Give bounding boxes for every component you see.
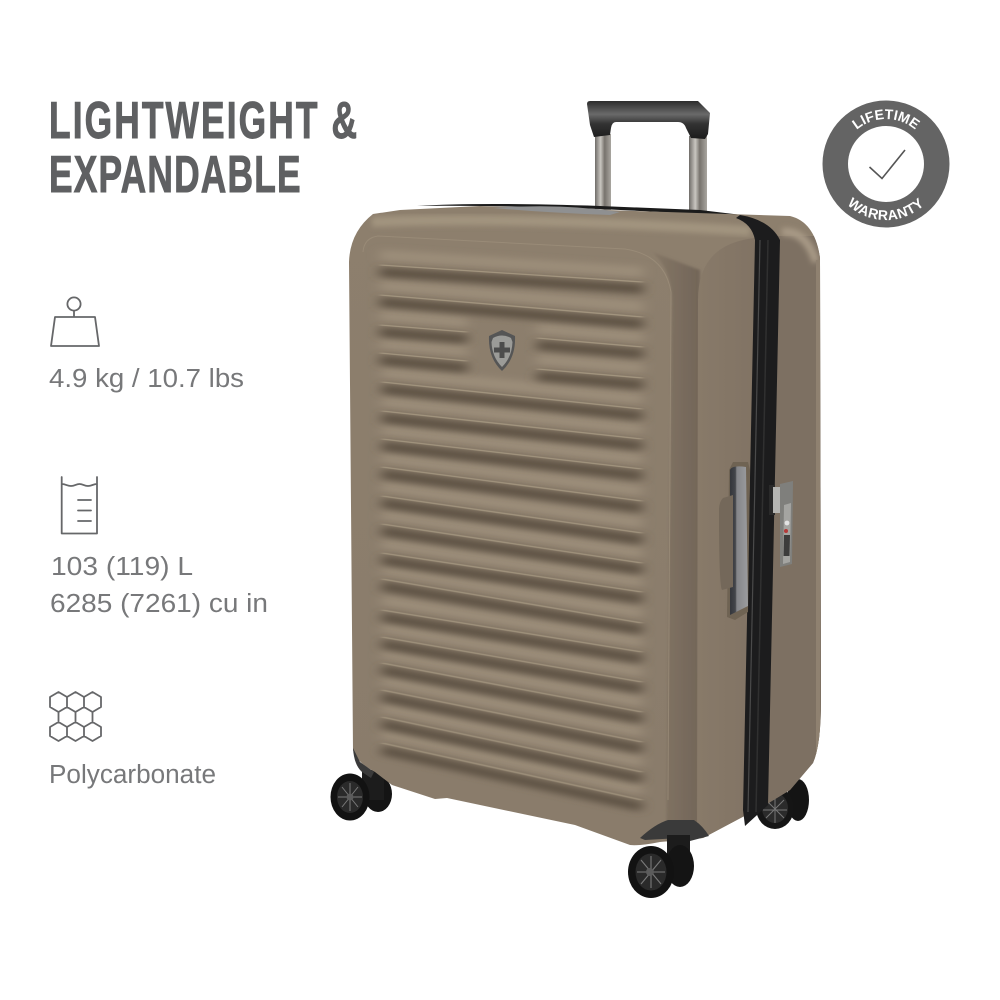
- side corner strip: [658, 256, 700, 842]
- right highlight: [782, 232, 816, 262]
- icon: check mark: [870, 150, 905, 178]
- spec: weight: [49, 297, 244, 393]
- rear wheels: [362, 770, 809, 829]
- spec: volume: [50, 477, 268, 618]
- combination lock: [769, 481, 793, 567]
- title: LIGHTWEIGHT &: [49, 92, 357, 150]
- icon: weight: [51, 297, 99, 346]
- right edge band: [816, 260, 820, 760]
- title: [49, 92, 357, 204]
- side panel right of zipper: [768, 236, 821, 804]
- volume text: [50, 553, 268, 618]
- volume text: 103 (119) L: [51, 553, 193, 581]
- badge text: lifetime: LIFETIME: [852, 109, 920, 130]
- front wheel: [628, 835, 694, 898]
- left wheel housing: [353, 748, 374, 778]
- infographic canvas: [49, 100, 950, 898]
- spec: material: [49, 692, 216, 789]
- front right wheel housing: [640, 820, 709, 841]
- weight text: 4.9 kg / 10.7 lbs: [49, 365, 244, 393]
- volume text: 6285 (7261) cu in: [50, 590, 268, 618]
- ribs: [380, 255, 643, 807]
- shell shading: [372, 220, 830, 850]
- side handle: [719, 462, 750, 620]
- top edge highlight: [372, 220, 750, 231]
- material text: Polycarbonate: [49, 761, 216, 789]
- emblem: [489, 330, 515, 371]
- suitcase: [330, 101, 830, 898]
- zipper: [736, 215, 780, 826]
- shell: [349, 206, 821, 845]
- icon: honeycomb: [50, 692, 101, 741]
- icon: beaker: [62, 477, 97, 534]
- badge: lifetime warranty: [822, 100, 950, 228]
- top edge black seam: [417, 204, 742, 219]
- top carry handle: [493, 206, 620, 215]
- side panel left of zipper: [697, 238, 755, 850]
- title: EXPANDABLE: [49, 146, 301, 204]
- badge text: warranty: WARRANTY: [848, 197, 922, 220]
- telescopic handle: [587, 101, 710, 214]
- lid panel outline: [363, 236, 671, 800]
- left wheel: [330, 774, 370, 820]
